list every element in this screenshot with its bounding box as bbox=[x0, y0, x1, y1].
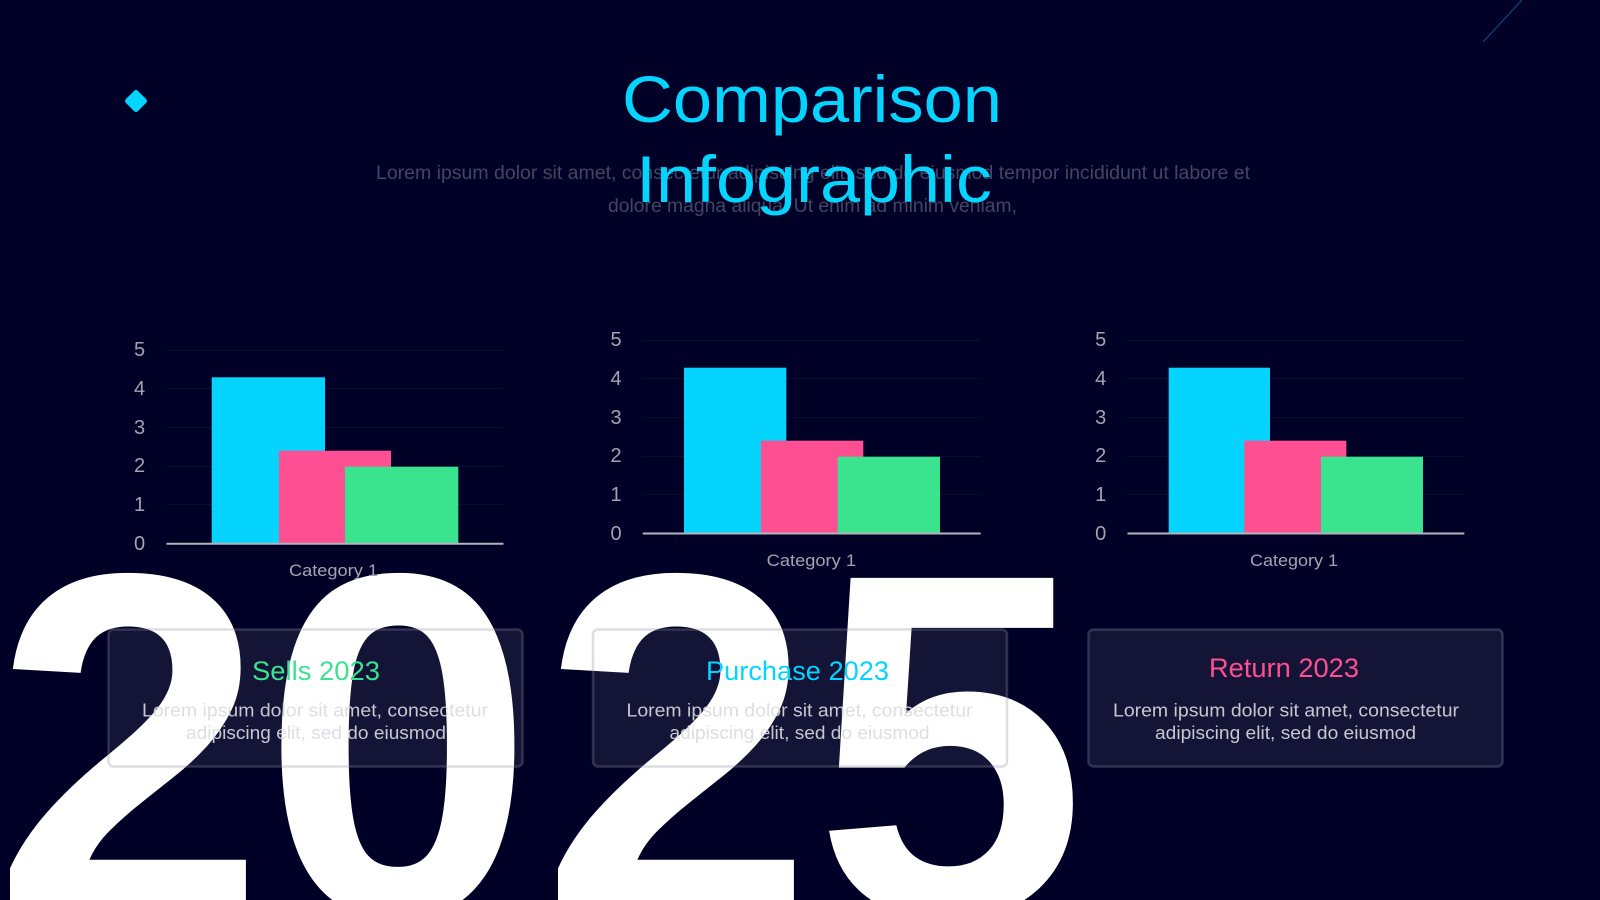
title bbox=[622, 62, 1002, 216]
y axis labels: 5 bbox=[134, 339, 145, 361]
heading: Return 2023 bbox=[1209, 653, 1359, 683]
body text: Lorem ipsum dolor sit amet, consectetur bbox=[626, 701, 972, 721]
title: Infographic bbox=[636, 142, 992, 216]
bar: blue bbox=[212, 377, 325, 543]
y axis labels bbox=[1095, 329, 1106, 545]
y axis labels: 3 bbox=[134, 417, 145, 439]
x axis label: Category 1 bbox=[1250, 551, 1338, 570]
y axis labels bbox=[610, 329, 622, 545]
subtitle: dolore magna aliqua. Ut enim ad minim veniam, bbox=[608, 196, 1017, 217]
panel: Sells 2023 bbox=[108, 630, 522, 766]
body text bbox=[626, 701, 972, 743]
body text bbox=[142, 701, 488, 743]
y axis labels: 2 bbox=[610, 445, 622, 467]
body text: adipiscing elit, sed do eiusmod bbox=[1155, 723, 1416, 743]
panel: chart 3 bbox=[1095, 329, 1464, 570]
y axis labels: 5 bbox=[610, 329, 622, 351]
heading: Purchase 2023 bbox=[706, 656, 889, 686]
bar: blue bbox=[1169, 368, 1270, 534]
y axis labels: 5 bbox=[1095, 329, 1106, 351]
panel: chart 2 bbox=[610, 329, 981, 570]
body text: adipiscing elit, sed do eiusmod bbox=[186, 723, 446, 743]
y axis labels: 4 bbox=[1095, 368, 1106, 390]
title: Comparison bbox=[622, 62, 1002, 136]
bar: green bbox=[838, 457, 940, 533]
subtitle bbox=[376, 163, 1251, 217]
subtitle: Lorem ipsum dolor sit amet, consectetur adipiscing elit, sed do eiusmod tempor incididunt ut labore et bbox=[376, 163, 1251, 184]
y axis labels: 0 bbox=[134, 533, 145, 555]
y axis labels: 1 bbox=[134, 494, 145, 516]
body text: Lorem ipsum dolor sit amet, consectetur bbox=[142, 701, 488, 721]
y axis labels: 1 bbox=[1095, 484, 1106, 506]
bar: green bbox=[1321, 457, 1423, 533]
y axis labels: 0 bbox=[1095, 523, 1106, 545]
y axis labels: 3 bbox=[610, 407, 622, 429]
y axis labels: 4 bbox=[610, 368, 622, 390]
body text: adipiscing elit, sed do eiusmod bbox=[670, 723, 930, 743]
panel: Purchase 2023 bbox=[593, 630, 1007, 766]
bar: pink bbox=[279, 451, 391, 543]
x axis label: Category 1 bbox=[767, 551, 856, 570]
y axis labels: 4 bbox=[134, 378, 145, 400]
bar: pink bbox=[1244, 441, 1346, 533]
y axis labels: 3 bbox=[1095, 407, 1106, 429]
heading: Sells 2023 bbox=[252, 656, 380, 686]
icon: diamond bullet bbox=[124, 89, 148, 113]
bar: blue bbox=[684, 368, 786, 534]
bar: pink bbox=[761, 441, 863, 533]
body text bbox=[1113, 701, 1459, 743]
bar: green bbox=[345, 467, 458, 543]
decorative diagonal line bbox=[1483, 0, 1522, 42]
panel: chart 1 bbox=[134, 339, 504, 580]
panel: Return 2023 bbox=[1088, 630, 1502, 766]
y axis labels: 2 bbox=[1095, 445, 1106, 467]
y axis labels: 1 bbox=[610, 484, 622, 506]
y axis labels: 0 bbox=[610, 523, 622, 545]
body text: Lorem ipsum dolor sit amet, consectetur bbox=[1113, 701, 1459, 721]
x axis label: Category 1 bbox=[289, 561, 378, 580]
y axis labels: 2 bbox=[134, 455, 145, 477]
y axis labels bbox=[134, 339, 145, 555]
